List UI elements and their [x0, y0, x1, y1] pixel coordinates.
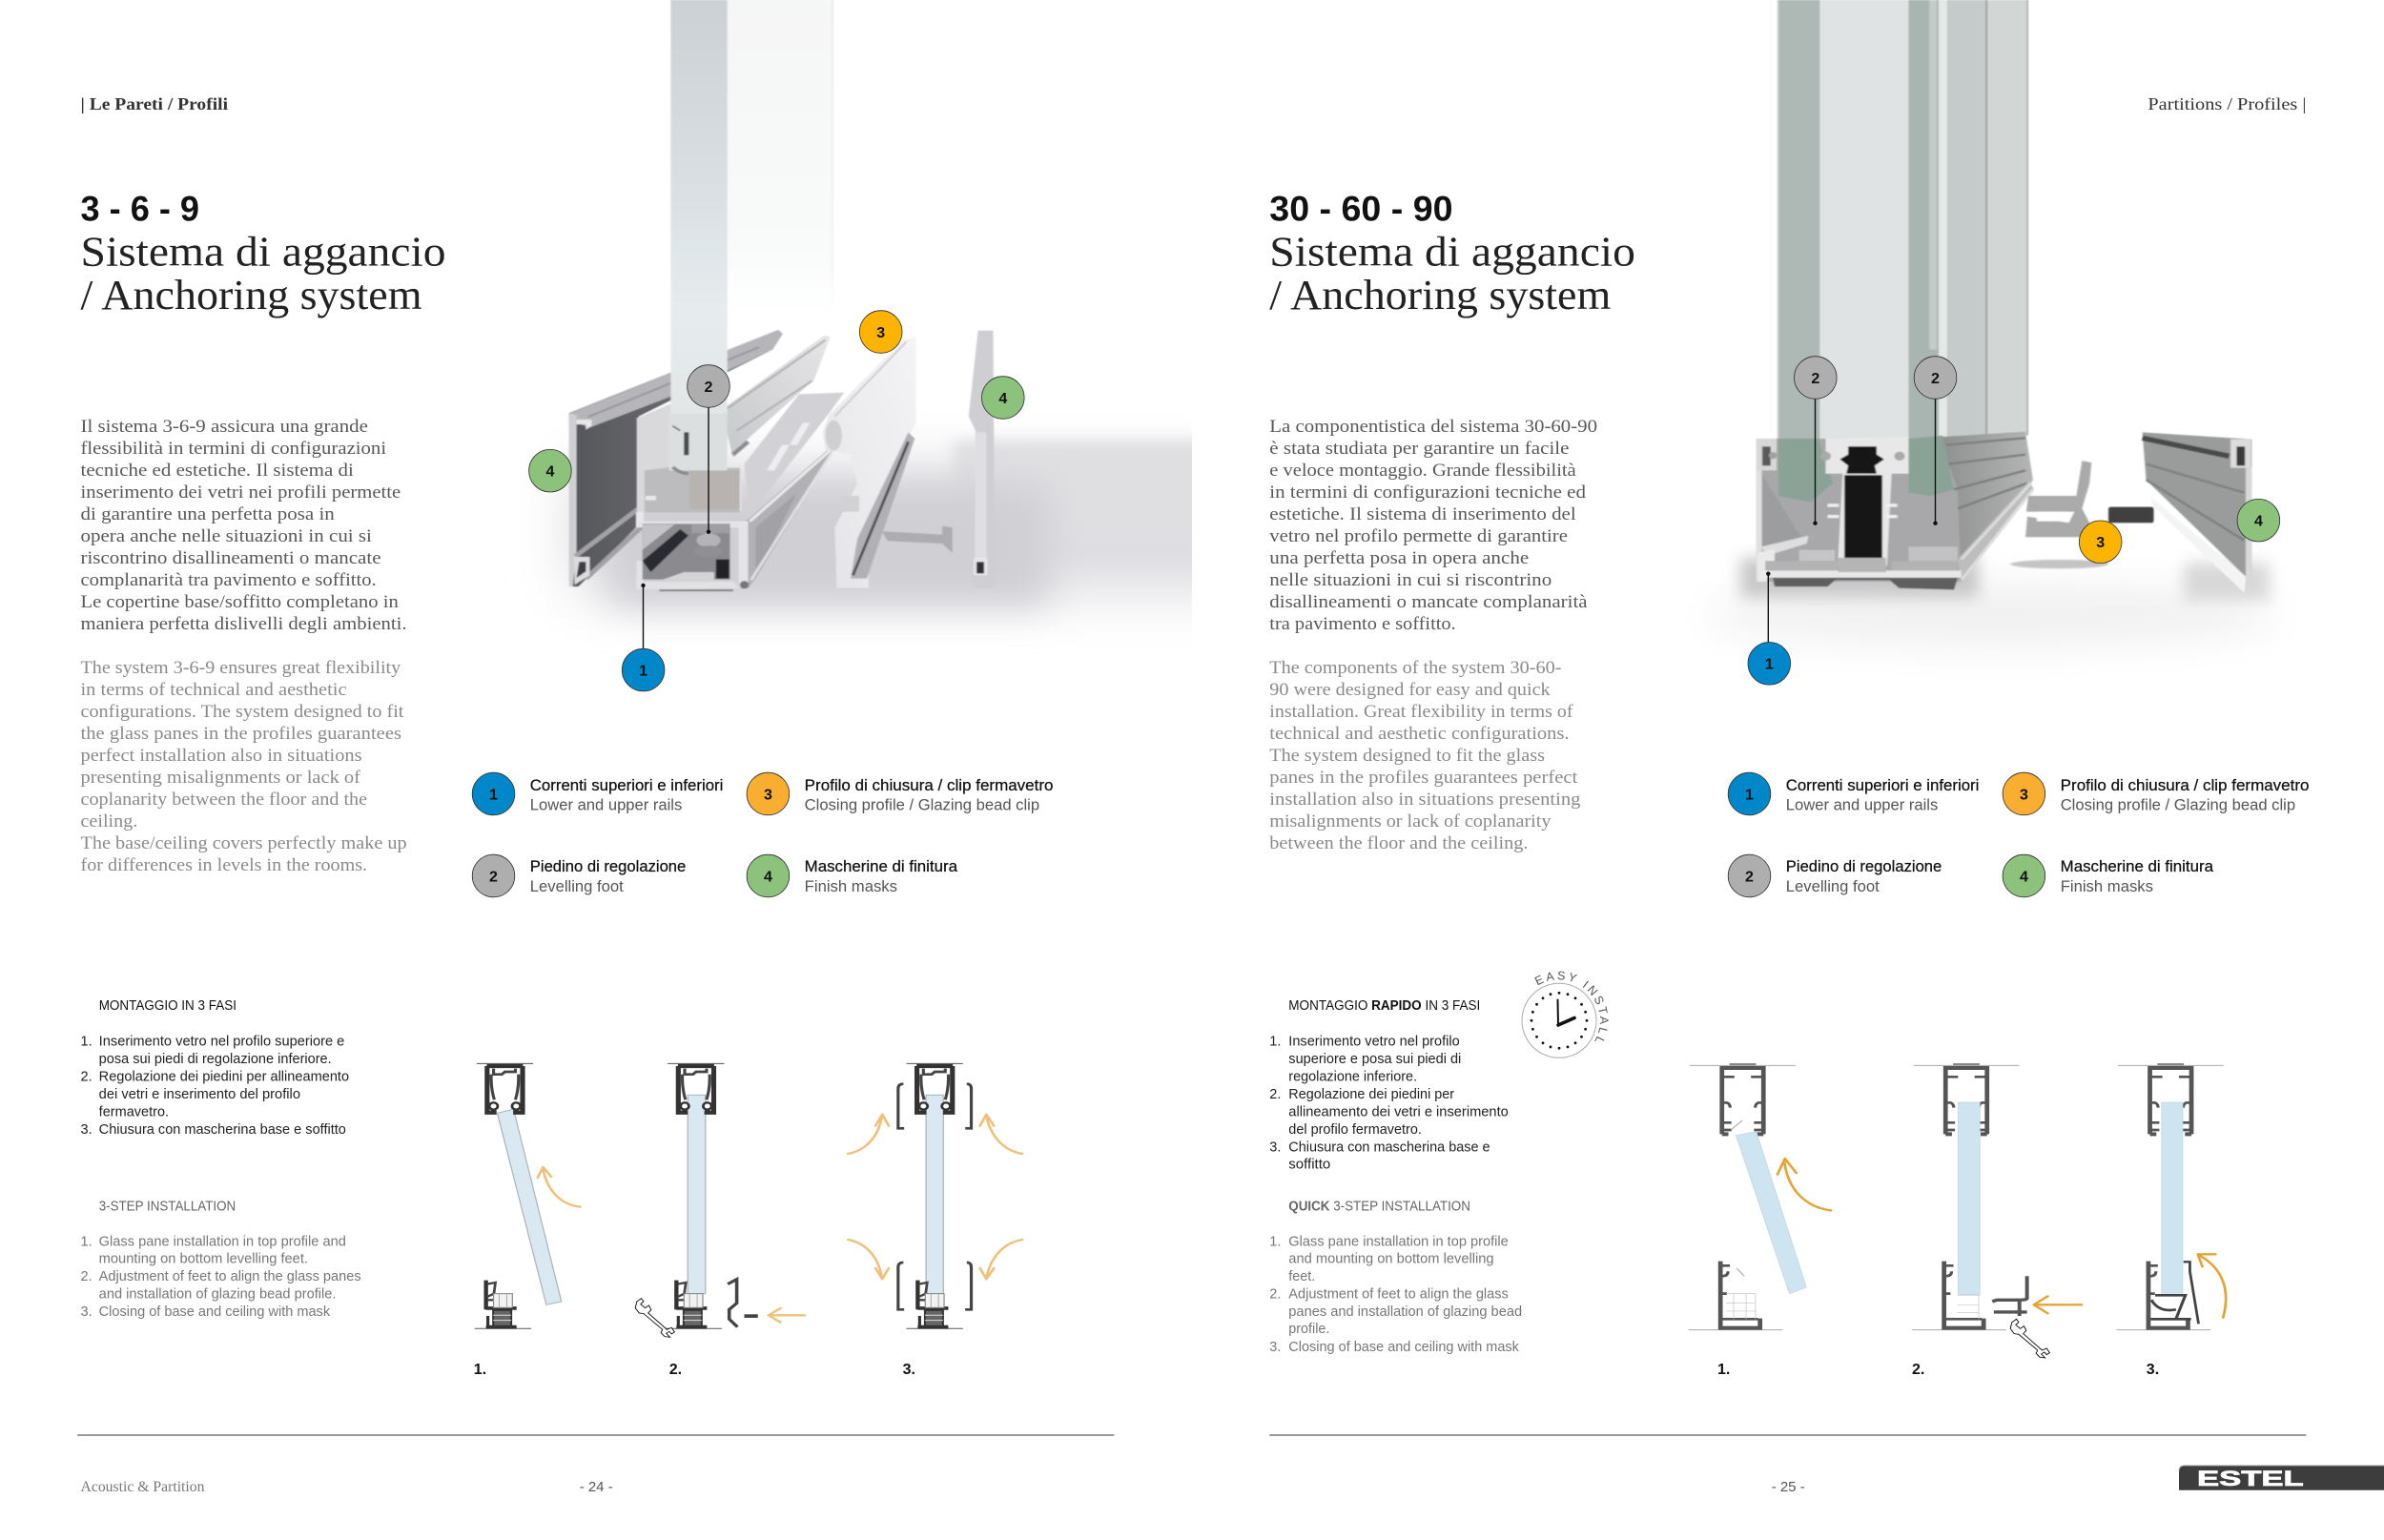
right page: English assembly steps: 1.	[1269, 1234, 1281, 1249]
left page: English assembly steps: mounting on bottom levelling feet.	[99, 1252, 308, 1267]
left page: legend item 1: 1	[489, 787, 498, 803]
right page: title: 30 - 60 - 90	[1269, 189, 1453, 229]
left page: section label: | Le Pareti / Profili	[80, 94, 228, 113]
right page: badge 4	[2237, 499, 2280, 542]
left page: badge 4 left: 4	[545, 463, 554, 481]
left page: English description	[80, 658, 407, 875]
left page: Italian assembly steps: 3.	[80, 1122, 92, 1138]
right page: legend item 2	[1728, 854, 1942, 897]
right page: installation diagrams	[1689, 1063, 2226, 1358]
right page: Italian assembly steps: allineamento dei vetri e inserimento	[1288, 1104, 1509, 1119]
right page: English assembly steps: 3.	[1269, 1340, 1281, 1355]
left page: step numbers	[474, 1362, 915, 1378]
left page: English assembly steps: Adjustment of feet to align the glass panes	[99, 1269, 361, 1284]
left page: footer label: Acoustic & Partition	[80, 1479, 204, 1495]
left page: Italian description: opera anche nelle situazioni in cui si	[80, 526, 372, 546]
left page: legend item 1: Lower and upper rails	[530, 797, 682, 814]
right page: badge 1: 1	[1765, 657, 1774, 673]
right page: callout line 2a	[1813, 399, 1818, 525]
right page: title	[1269, 189, 1635, 318]
left page: callout line 2	[707, 407, 710, 534]
right page: legend item 4: Mascherine di finitura	[2061, 858, 2214, 875]
left page: legend item 4: Finish masks	[805, 878, 897, 895]
left page: badge 4 right	[982, 377, 1024, 419]
left page: English description: The system 3-6-9 ensures great flexibility	[80, 658, 401, 678]
right page: English assembly steps: panes and installation of glazing bead	[1288, 1304, 1522, 1320]
right page: English description: The system designed to fit the glass	[1269, 746, 1545, 766]
right page: badge 3	[2079, 521, 2122, 564]
logo: ESTEL tab	[2179, 1466, 2384, 1490]
right page: Italian assembly steps: regolazione inferiore.	[1288, 1070, 1417, 1085]
left page: badge 4 left	[529, 449, 571, 492]
right page: English description: installation also in situations presenting	[1269, 790, 1581, 810]
right page: English description: technical and aesthetic configurations.	[1269, 724, 1570, 744]
right page: legend item 3: Closing profile / Glazing bead clip	[2061, 797, 2295, 814]
left page: English description: in terms of technical and aesthetic	[80, 680, 347, 700]
right page: English assembly steps: feet.	[1288, 1269, 1315, 1284]
left page: installation diagrams	[475, 1063, 1022, 1337]
right page: badge 1	[1748, 643, 1791, 685]
icon: easy install clock: EASY INSTALL	[1534, 971, 1608, 1041]
right page: Italian description: tra pavimento e soffitto.	[1269, 614, 1456, 634]
right page: title: Sistema di aggancio	[1269, 229, 1635, 275]
left page: legend item 2	[472, 854, 686, 897]
left page: step numbers: 1.	[474, 1362, 486, 1378]
right page: English assembly steps: Closing of base and ceiling with mask	[1288, 1340, 1520, 1355]
diagram step 3	[848, 1063, 1022, 1328]
left page: Italian assembly steps: posa sui piedi di regolazione inferiore.	[99, 1052, 332, 1067]
left page: legend item 4: Mascherine di finitura	[805, 858, 958, 875]
left page: Italian description	[80, 417, 407, 634]
right page: badge 2 left	[1795, 357, 1837, 399]
left page: title: / Anchoring system	[80, 272, 421, 318]
left page: English assembly steps: Glass pane installation in top profile and	[99, 1234, 346, 1249]
right page: section label: Partitions / Profiles |	[2148, 94, 2306, 113]
right page: legend item 4: 4	[2020, 869, 2028, 885]
right page: Italian description: è stata studiata per garantire un facile	[1269, 439, 1570, 459]
left page: English description: for differences in levels in the rooms.	[80, 855, 367, 875]
right page: Italian description: disallineamenti o mancate complanarità	[1269, 592, 1588, 612]
right page: legend item 4: Finish masks	[2061, 878, 2153, 895]
diagram step 2	[635, 1063, 805, 1337]
left page: title: 3 - 6 - 9	[80, 189, 199, 229]
right page: English description: misalignments or lack of coplanarity	[1269, 811, 1552, 832]
left page: English description: configurations. The system designed to fit	[80, 702, 404, 722]
right page: legend item 2: Levelling foot	[1786, 878, 1880, 895]
left page: badge 3: 3	[876, 325, 885, 341]
right page: Italian description: una perfetta posa in opera anche	[1269, 548, 1529, 568]
left page: English assembly steps: Closing of base and ceiling with mask	[99, 1304, 331, 1320]
left page: legend item 4	[747, 854, 958, 897]
right page: legend item 1: Correnti superiori e inferiori	[1786, 777, 1979, 794]
left page: English description: coplanarity between the floor and the	[80, 790, 367, 810]
right page: Italian assembly steps: 1.	[1269, 1034, 1281, 1049]
right page: Italian assembly steps: Chiusura con mascherina base e	[1288, 1140, 1490, 1155]
left page: Italian assembly steps: Chiusura con mascherina base e soffitto	[99, 1122, 346, 1138]
left page: English assembly steps: and installation of glazing bead profile.	[99, 1287, 336, 1303]
left page: legend item 3: Profilo di chiusura / clip fermavetro	[805, 777, 1053, 794]
left page: legend item 4: 4	[764, 869, 772, 885]
right page: legend item 2: Piedino di regolazione	[1786, 858, 1942, 875]
right page: legend item 3: 3	[2020, 787, 2028, 803]
right page: English description: panes in the profiles guarantees perfect	[1269, 768, 1578, 788]
right page: step numbers: 3.	[2147, 1362, 2159, 1378]
right page: Italian description: nelle situazioni in cui si riscontrino	[1269, 570, 1552, 590]
left page: legend item 1	[472, 772, 723, 815]
right page: step numbers: 2.	[1912, 1362, 1924, 1378]
left page: Italian description: flessibilità in termini di configurazioni	[80, 439, 386, 459]
right page: callout line 1	[1766, 572, 1771, 644]
diagram step 1	[1689, 1063, 1831, 1330]
right page: badge 2 left: 2	[1811, 371, 1819, 387]
right page: legend item 3: Profilo di chiusura / clip fermavetro	[2061, 777, 2310, 794]
right page: English assembly steps: and mounting on bottom levelling	[1288, 1252, 1494, 1267]
left page: Italian assembly steps: MONTAGGIO IN 3 FASI	[99, 998, 236, 1014]
right page: photo of 30-60-90 profile assembly	[1707, 0, 2279, 646]
logo: ESTEL tab: ESTEL	[2197, 1467, 2304, 1490]
right page: legend item 1: Lower and upper rails	[1786, 797, 1938, 814]
right page: English assembly steps: Adjustment of feet to align the glass	[1288, 1287, 1509, 1303]
right page: Italian description	[1269, 417, 1597, 634]
left page: step numbers: 2.	[669, 1362, 682, 1378]
right page: Italian assembly steps: MONTAGGIO RAPIDO IN 3 FASI	[1288, 998, 1480, 1014]
right page: English description: installation. Great flexibility in terms of	[1269, 702, 1573, 722]
diagram step 3	[2116, 1063, 2226, 1330]
right page: badge 3: 3	[2096, 535, 2105, 551]
left page: Italian assembly steps: 1.	[80, 1034, 92, 1049]
right page: English description: 90 were designed for easy and quick	[1269, 680, 1551, 700]
right page: legend item 3	[2003, 772, 2310, 815]
right page: Italian description: estetiche. Il sistema di inserimento del	[1269, 504, 1576, 524]
left page: page number: - 24 -	[580, 1479, 613, 1495]
right page: callout line 2b	[1933, 399, 1938, 525]
left page: step numbers: 3.	[903, 1362, 915, 1378]
right page: legend item 2: 2	[1745, 869, 1754, 885]
left page: photo of 3-6-9 profile assembly	[569, 0, 1259, 606]
left page: Italian description: complanarità tra pavimento e soffitto.	[80, 570, 377, 590]
right page: title: / Anchoring system	[1269, 272, 1611, 318]
right page: English assembly steps	[1269, 1200, 1522, 1355]
right page: badge 2 right	[1914, 357, 1957, 399]
right page: Italian assembly steps	[1269, 998, 1509, 1173]
right page: legend item 4	[2003, 854, 2214, 897]
left page: badge 3	[859, 311, 902, 353]
right page: Italian assembly steps: Regolazione dei piedini per	[1288, 1087, 1454, 1102]
left page: title: Sistema di aggancio	[80, 229, 446, 275]
left page: English assembly steps: 2.	[80, 1269, 92, 1284]
left page: English description: ceiling.	[80, 811, 137, 832]
left page: Italian assembly steps	[80, 998, 349, 1138]
left page: Italian assembly steps: Regolazione dei piedini per allineamento	[99, 1070, 349, 1085]
right page: badge 2 right: 2	[1931, 371, 1940, 387]
right page: Italian description: e veloce montaggio. Grande flessibilità	[1269, 461, 1576, 481]
right page: Italian description: in termini di configurazioni tecniche ed	[1269, 483, 1587, 503]
left page: callout line 1	[641, 584, 646, 650]
right page: English description: between the floor and the ceiling.	[1269, 833, 1528, 853]
right page: English assembly steps: QUICK 3-STEP INSTALLATION	[1288, 1200, 1470, 1215]
left page: Italian description: tecniche ed estetiche. Il sistema di	[80, 461, 354, 481]
left page: Italian description: maniera perfetta dislivelli degli ambienti.	[80, 614, 407, 634]
right page: step numbers	[1717, 1362, 2159, 1378]
left page: Italian description: Le copertine base/soffitto completano in	[80, 592, 399, 612]
left page: English description: presenting misalignments or lack of	[80, 768, 361, 788]
left page: legend item 3	[747, 772, 1053, 815]
right page: Italian assembly steps: 3.	[1269, 1140, 1281, 1155]
right page: English assembly steps: profile.	[1288, 1322, 1329, 1337]
right page: Italian assembly steps: superiore e posa sui piedi di	[1288, 1052, 1461, 1067]
right page: page number: - 25 -	[1772, 1479, 1805, 1495]
left page: English assembly steps: 1.	[80, 1234, 92, 1249]
diagram step 2	[1912, 1063, 2082, 1358]
right page: legend item 1: 1	[1745, 787, 1754, 803]
right page: Italian assembly steps: Inserimento vetro nel profilo	[1288, 1034, 1460, 1049]
right page: English assembly steps: 2.	[1269, 1287, 1281, 1303]
left page: badge 2: 2	[705, 380, 713, 396]
left page: badge 1	[622, 648, 665, 691]
left page: title	[80, 189, 446, 318]
left page: Italian description: inserimento dei vetri nei profili permette	[80, 483, 401, 503]
right page: legend item 1	[1728, 772, 1979, 815]
left page: badge 4 right: 4	[998, 391, 1007, 407]
left page: legend item 3: 3	[764, 787, 772, 803]
right page: English assembly steps: Glass pane installation in top profile	[1288, 1234, 1509, 1249]
left page: Italian assembly steps: dei vetri e inserimento del profilo	[99, 1087, 300, 1102]
right page: step numbers: 1.	[1717, 1362, 1730, 1378]
left page: Italian description: riscontrino disallineamenti o mancate	[80, 548, 381, 568]
left page: badge 1: 1	[639, 663, 647, 679]
left page: legend item 2: Piedino di regolazione	[530, 858, 686, 875]
right page: Italian assembly steps: 2.	[1269, 1087, 1281, 1102]
left page: Italian assembly steps: fermavetro.	[99, 1104, 169, 1119]
left page: English assembly steps: 3.	[80, 1304, 92, 1320]
left page: Italian assembly steps: Inserimento vetro nel profilo superiore e	[99, 1034, 344, 1049]
right page: Italian description: La componentistica del sistema 30-60-90	[1269, 417, 1597, 437]
left page: English description: perfect installation also in situations	[80, 746, 362, 766]
right page: English description	[1269, 658, 1581, 853]
right page: English description: The components of the system 30-60-	[1269, 658, 1562, 678]
left page: Italian assembly steps: 2.	[80, 1070, 92, 1085]
left page: legend item 1: Correnti superiori e inferiori	[530, 777, 723, 794]
left page: English description: the glass panes in the profiles guarantees	[80, 724, 401, 744]
left page: badge 2	[688, 365, 730, 407]
diagram step 1	[475, 1063, 581, 1328]
right page: Italian assembly steps: soffitto	[1288, 1158, 1330, 1173]
left page: Italian description: Il sistema 3-6-9 assicura una grande	[80, 417, 368, 437]
right page: Italian assembly steps: del profilo fermavetro.	[1288, 1122, 1422, 1138]
left page: English assembly steps	[80, 1200, 361, 1320]
left page: legend item 3: Closing profile / Glazing bead clip	[805, 797, 1039, 814]
left page: legend item 2: 2	[489, 869, 498, 885]
left page: legend item 2: Levelling foot	[530, 878, 624, 895]
left page: Italian description: di garantire una perfetta posa in	[80, 504, 335, 524]
right page: Italian description: vetro nel profilo permette di garantire	[1269, 526, 1568, 546]
left page: English description: The base/ceiling covers perfectly make up	[80, 833, 407, 853]
left page: English assembly steps: 3-STEP INSTALLATION	[99, 1200, 236, 1215]
right page: badge 4: 4	[2254, 513, 2263, 530]
